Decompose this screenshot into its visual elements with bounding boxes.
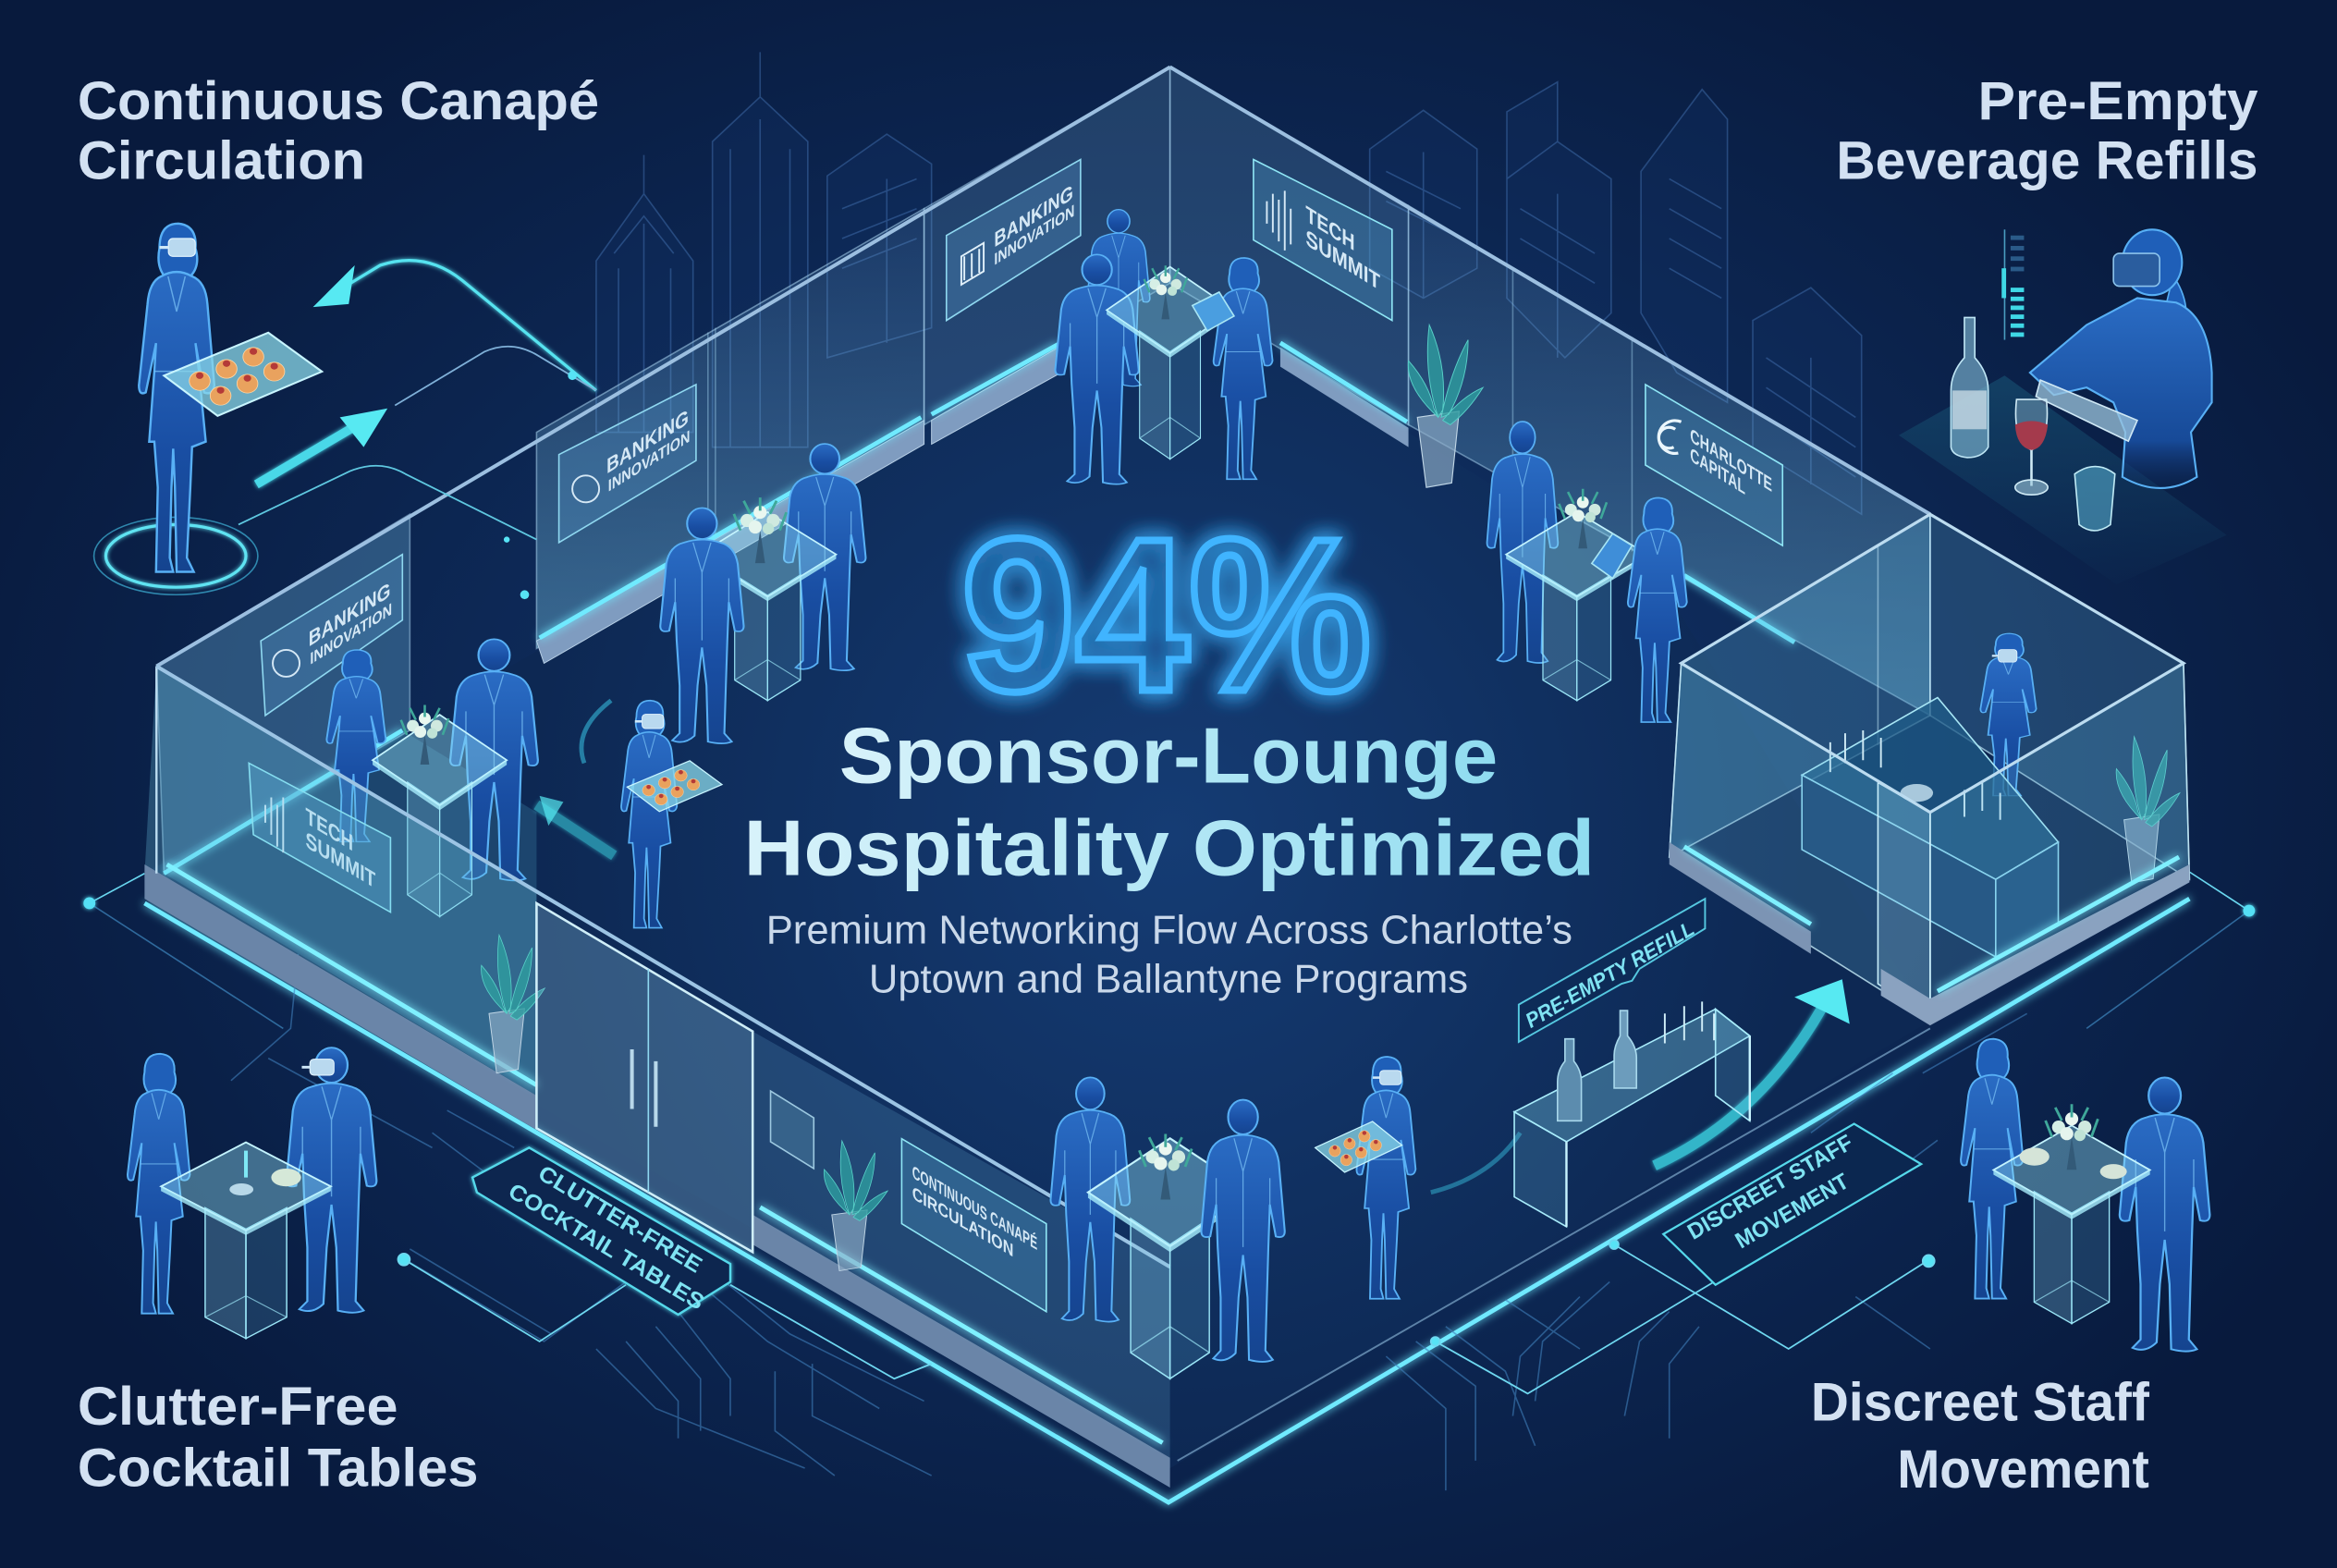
label: clutter-free cocktail tables — [78, 1377, 479, 1498]
floor — [144, 283, 1930, 1468]
left room: SUMMIT — [306, 827, 375, 894]
label: clutter-free cocktail tables: Clutter-Free — [78, 1377, 398, 1437]
circuit connector: left callout — [398, 1254, 932, 1378]
callout: clutter-free cocktail tables: CLUTTER-FREE — [533, 1161, 706, 1279]
left room — [164, 639, 538, 1096]
sign: charlotte capital: CHARLOTTE — [1690, 423, 1772, 496]
sign: continuous canapé circulation: CONTINUOUS CANAPÉ — [912, 1162, 1037, 1255]
sign: charlotte capital — [1646, 385, 1782, 545]
staff with tray: center left — [536, 701, 722, 928]
outer floor edge glow line — [83, 872, 2255, 1502]
cluster: upper right table — [1487, 422, 1687, 722]
glass beverage display — [1514, 1001, 1750, 1227]
callout: discreet staff movement: MOVEMENT — [1731, 1169, 1854, 1254]
label: continuous canapé circulation: Continuous Canapé — [78, 71, 599, 131]
back right wall — [1170, 67, 1930, 716]
subtitle: Uptown and Ballantyne Programs — [869, 958, 1468, 1002]
sign: continuous canapé circulation — [901, 1139, 1046, 1312]
label: continuous canapé circulation — [78, 71, 599, 190]
vignette: clutter-free table figures — [128, 1047, 376, 1339]
level gauge — [2001, 229, 2024, 340]
sign: banking innovation top: INNOVATION — [994, 201, 1074, 270]
circuit traces — [231, 954, 2027, 1490]
cluster: upper left table — [660, 444, 865, 743]
callout: pre-empty refill: PRE-EMPTY REFILL — [1522, 917, 1698, 1033]
main heading: Sponsor-Lounge — [839, 712, 1498, 800]
callout: discreet staff movement: DISCREET STAFF — [1683, 1130, 1857, 1245]
arrows: canapé circulation — [239, 261, 596, 599]
sign: banking innovation left room: INNOVATION — [310, 599, 392, 669]
cluster: center top table — [1055, 210, 1273, 484]
label: discreet staff movement — [1811, 1372, 2150, 1500]
sign: banking innovation middle: INNOVATION — [608, 426, 690, 496]
label: discreet staff movement: Movement — [1897, 1439, 2149, 1500]
hero statistic: 94% — [961, 493, 1371, 736]
subtitle — [766, 909, 1572, 1002]
sign: tech summit top: TECH — [1305, 201, 1355, 256]
subtitle: Premium Networking Flow Across Charlotte’s — [766, 909, 1572, 953]
sign: tech summit top: SUMMIT — [1305, 224, 1380, 296]
arrow: to beverage bar — [1655, 979, 1850, 1166]
glass double door — [536, 903, 752, 1252]
label: pre-empty beverage refills: Pre-Empty — [1977, 71, 2258, 131]
label: pre-empty beverage refills: Beverage Refills — [1836, 130, 2258, 190]
left room: TECH — [306, 802, 353, 856]
wall info plaque and plant — [771, 1091, 887, 1271]
plant: left wall — [482, 935, 544, 1073]
circuit connector: right callout — [1431, 1240, 1935, 1393]
vignette: discreet movement table figures — [1961, 1039, 2209, 1352]
right room box — [1670, 514, 2189, 1025]
cluster: lower center table — [1050, 1077, 1285, 1378]
label: continuous canapé circulation: Circulation — [78, 130, 365, 190]
back left wall — [156, 67, 1170, 874]
sign: tech summit top — [1254, 160, 1392, 321]
sign: charlotte capital: CAPITAL — [1690, 443, 1745, 499]
sign: banking innovation middle: BANKING — [606, 405, 689, 479]
sign: banking innovation top — [947, 160, 1081, 321]
lower left display: front wall — [144, 667, 1170, 1488]
figure: beverage refill staff — [2030, 229, 2212, 488]
main heading — [744, 712, 1595, 892]
callout: clutter-free cocktail tables: COCKTAIL TABLES — [504, 1179, 708, 1316]
background skyline — [596, 52, 1862, 514]
bar counter: top right staff station — [1899, 375, 2227, 584]
callout: discreet staff movement — [1663, 1124, 1921, 1285]
sign: banking innovation top: BANKING — [994, 180, 1073, 252]
staff with tray: lower center — [1315, 1057, 1520, 1299]
plant: top right — [1408, 325, 1483, 487]
sign: continuous canapé circulation: CIRCULATION — [912, 1183, 1013, 1261]
callout: clutter-free cocktail tables — [472, 1147, 730, 1316]
sign: banking innovation middle — [559, 385, 696, 543]
figure: staff with tray and ring — [94, 224, 322, 594]
label: discreet staff movement: Discreet Staff — [1811, 1372, 2150, 1432]
sign: banking innovation left room: BANKING — [309, 578, 390, 652]
label: pre-empty beverage refills — [1836, 71, 2258, 190]
label: clutter-free cocktail tables: Cocktail Tables — [78, 1438, 479, 1498]
sign: banking innovation left room — [261, 555, 402, 716]
main heading: Hospitality Optimized — [744, 804, 1595, 892]
bottle and glasses: beverage station — [1951, 317, 2115, 531]
